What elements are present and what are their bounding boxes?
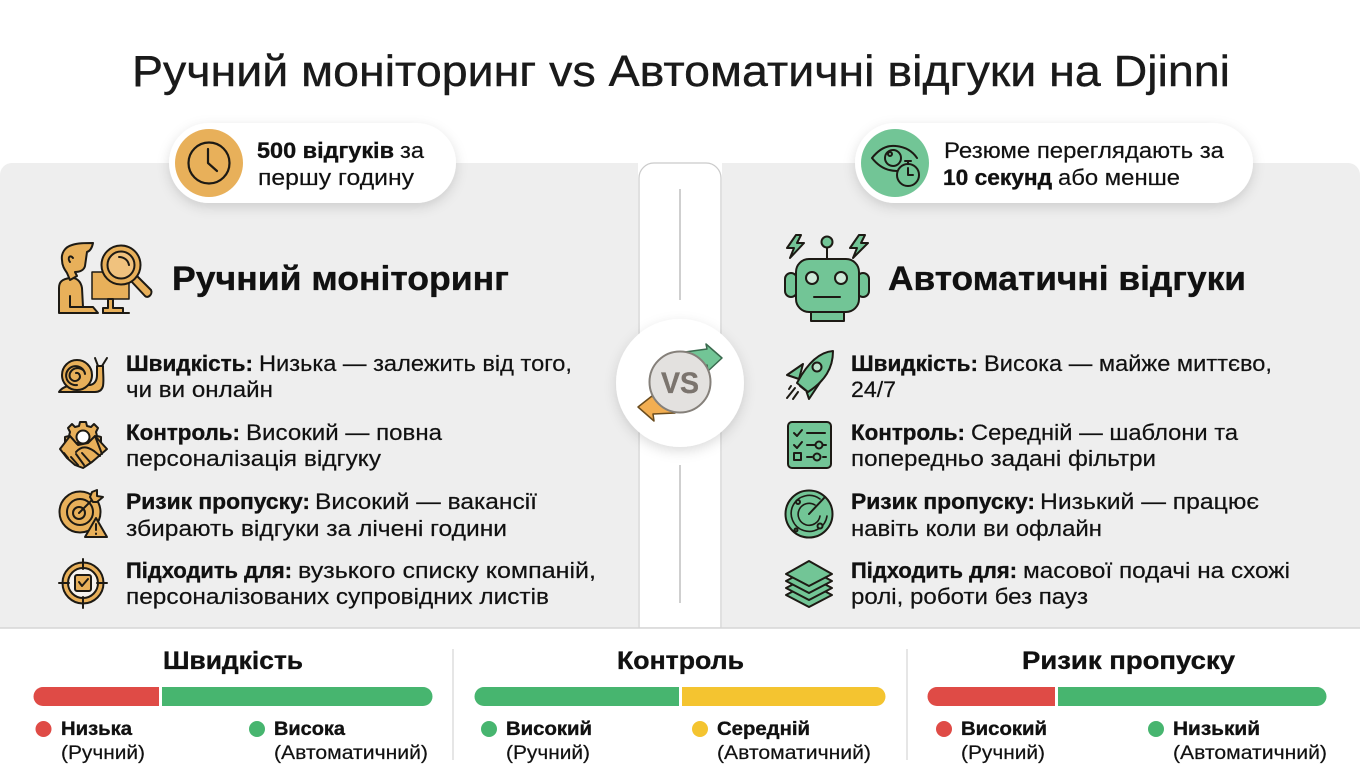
comparison: miss risk: Низький <box>1173 719 1260 740</box>
center divider strip <box>639 163 721 628</box>
item: miss risk, automatic: Ризик пропуску: <box>851 489 1035 514</box>
item: suited for, automatic: ролі, роботи без пауз <box>851 584 1088 609</box>
item: speed, manual <box>126 351 572 402</box>
callout: 10 seconds <box>855 123 1253 203</box>
heading: automatic responses: Автоматичні відгуки <box>888 260 1246 298</box>
item: miss risk, manual: Ризик пропуску: <box>126 489 310 514</box>
comparison: miss risk: (Ручний) <box>961 743 1045 764</box>
VS badge: VS <box>661 367 699 400</box>
callout: 10 seconds: Резюме переглядають за <box>944 138 1225 163</box>
item: suited for, manual: Підходить для: <box>126 558 292 583</box>
icon: rocket <box>787 351 833 399</box>
icon: green arrow <box>685 344 722 378</box>
callout: 500 responses: за <box>400 138 424 163</box>
comparison: speed: Низька <box>61 719 132 740</box>
callout: 500 responses: першу годину <box>258 165 415 190</box>
item: control, automatic: Середній — шаблони та <box>971 420 1239 445</box>
panel: manual monitoring background <box>0 163 638 628</box>
comparison: speed: Висока <box>274 719 345 740</box>
item: speed, manual: Низька — залежить від того, <box>259 351 572 376</box>
comparison: miss risk: (Автоматичний) <box>1173 743 1327 764</box>
item: speed, manual: Швидкість: <box>126 351 253 376</box>
item: speed, automatic <box>851 351 1272 402</box>
item: control, automatic: попередньо задані фільтри <box>851 446 1156 471</box>
item: miss risk, automatic <box>851 489 1259 541</box>
item: suited for, manual: персоналізованих супровідних листів <box>126 584 549 609</box>
icon: snail <box>59 358 107 392</box>
callout: 10 seconds: або менше <box>1058 165 1180 190</box>
item: control, automatic <box>851 420 1239 471</box>
item: miss risk, automatic: навіть коли ви офлайн <box>851 516 1102 541</box>
item: suited for, automatic <box>851 558 1290 609</box>
item: speed, manual: чи ви онлайн <box>126 377 273 402</box>
comparison: control: (Автоматичний) <box>717 743 871 764</box>
comparison: miss risk: Високий <box>961 719 1047 740</box>
comparison: control: Середній <box>717 719 810 740</box>
comparison: speed: (Автоматичний) <box>274 743 428 764</box>
item: control, manual: персоналізація відгуку <box>126 446 381 471</box>
title: Ручний моніторинг vs Автоматичні відгуки на Djinni <box>132 47 1230 96</box>
icon: eye with stopwatch <box>872 146 919 186</box>
icon: robot <box>785 235 869 321</box>
item: miss risk, manual: Високий — вакансії <box>315 489 537 514</box>
item: speed, automatic: Швидкість: <box>851 351 978 376</box>
icon: target with warning <box>60 490 107 537</box>
VS badge <box>616 319 744 447</box>
item: suited for, manual: вузького списку компаній, <box>298 558 596 583</box>
panel: automatic responses background <box>722 163 1360 628</box>
icon: orange arrow <box>638 386 675 421</box>
callout: 500 responses: 500 відгуків <box>257 138 394 163</box>
item: miss risk, manual <box>126 489 537 541</box>
comparison: speed: (Ручний) <box>61 743 145 764</box>
item: miss risk, automatic: Низький — працює <box>1040 489 1259 514</box>
bottom band <box>0 628 1360 784</box>
icon: checklist <box>788 422 831 468</box>
icon: layers <box>786 561 832 607</box>
icon: handshake with gear <box>60 422 107 468</box>
comparison: speed: Швидкість <box>163 647 303 675</box>
callout: 10 seconds: 10 секунд <box>943 165 1052 190</box>
item: control, automatic: Контроль: <box>851 420 965 445</box>
icon: clock <box>188 142 230 184</box>
item: control, manual: Контроль: <box>126 420 240 445</box>
item: speed, automatic: 24/7 <box>851 377 896 402</box>
item: control, manual <box>126 420 443 471</box>
icon: crosshair with checkbox <box>59 559 107 608</box>
item: suited for, automatic: Підходить для: <box>851 558 1017 583</box>
icon: radar <box>786 490 832 538</box>
item: suited for, automatic: масової подачі на схожі <box>1023 558 1290 583</box>
comparison: control: (Ручний) <box>506 743 590 764</box>
item: speed, automatic: Висока — майже миттєво, <box>984 351 1272 376</box>
comparison: control: Контроль <box>617 647 744 675</box>
comparison: control: Високий <box>506 719 592 740</box>
item: miss risk, manual: збирають відгуки за лічені години <box>126 516 507 541</box>
item: control, manual: Високий — повна <box>246 420 443 445</box>
comparison: control <box>474 647 886 764</box>
comparison: speed <box>34 647 433 764</box>
heading: manual monitoring: Ручний моніторинг <box>172 260 509 298</box>
comparison: miss risk: Ризик пропуску <box>1022 647 1235 675</box>
item: suited for, manual <box>126 558 596 609</box>
comparison: miss risk <box>928 647 1327 764</box>
callout: 500 responses <box>169 123 456 203</box>
icon: person with magnifier <box>59 243 151 313</box>
